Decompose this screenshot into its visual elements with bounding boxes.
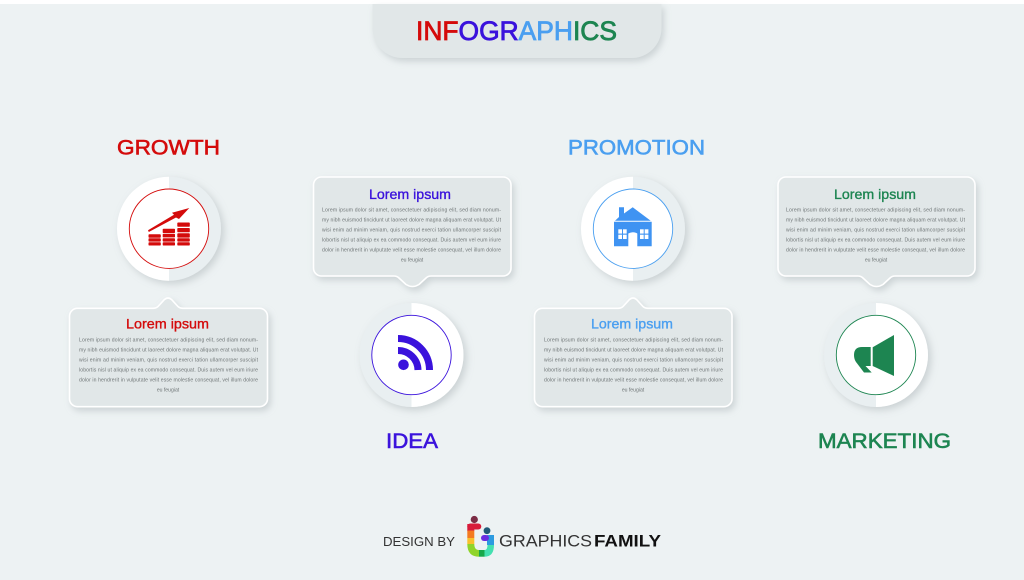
card heading: Lorem ipsum [834,186,916,202]
card body text: dolor in hendrerit in vulputate velit esse molestie consequat, vel illum dolore [544,378,723,384]
card body text: my nibh euismod tincidunt ut laoreet dolore magna aliquam erat volutpat. Ut [544,348,724,354]
card body text [322,208,502,264]
card body text: dolor in hendrerit in vulputate velit esse molestie consequat, vel illum dolore [322,248,501,254]
card body text: wisi enim ad minim veniam, quis nostrud exerci tation ullamcorper suscipit [786,228,966,234]
card body text [786,208,966,264]
card body text: eu feugiat [622,388,645,394]
panel: promotion text card [534,298,732,407]
title: INFOGRAPHICS [416,16,617,46]
icon: growth chart [148,208,190,246]
title banner [372,4,662,58]
card body text: Lorem ipsum dolor sit amet, consectetuer adipiscing elit, sed diam nonum- [544,338,723,344]
icon: megaphone [854,335,894,376]
card body text [79,338,259,394]
icon: graphicsfamily logo [467,516,494,557]
panel: marketing text card [778,177,975,286]
footer credit: FAMILY [594,533,661,551]
card body text: lobortis nisl ut aliquip ex ea commodo consequat. Duis autem vel eum iriure [322,238,501,244]
heading: growth: GROWTH [117,134,220,160]
card body text: wisi enim ad minim veniam, quis nostrud exerci tation ullamcorper suscipit [79,358,259,364]
card body text: Lorem ipsum dolor sit amet, consectetuer adipiscing elit, sed diam nonum- [786,208,965,214]
card body text: Lorem ipsum dolor sit amet, consectetuer adipiscing elit, sed diam nonum- [322,208,501,214]
card heading: Lorem ipsum [591,316,673,332]
card body text: lobortis nisl ut aliquip ex ea commodo consequat. Duis autem vel eum iriure [544,368,723,374]
icon: rss feed [398,338,430,370]
card body text: dolor in hendrerit in vulputate velit esse molestie consequat, vel illum dolore [79,378,258,384]
design by label: DESIGN BY [383,534,455,549]
panel: growth text card [70,298,268,407]
card body text: my nibh euismod tincidunt ut laoreet dolore magna aliquam erat volutpat. Ut [322,218,502,224]
card heading: Lorem ipsum [369,186,451,202]
card body text: eu feugiat [157,388,180,394]
brand wordmark: GRAPHICS [499,533,592,551]
card body text [544,338,724,394]
heading: promotion: PROMOTION [568,134,705,160]
circle: marketing [824,303,928,407]
card body text: my nibh euismod tincidunt ut laoreet dolore magna aliquam erat volutpat. Ut [786,218,966,224]
card body text: eu feugiat [401,258,424,264]
card body text: dolor in hendrerit in vulputate velit esse molestie consequat, vel illum dolore [786,248,965,254]
circle: promotion [581,177,685,281]
footer credit [383,516,661,557]
card body text: lobortis nisl ut aliquip ex ea commodo consequat. Duis autem vel eum iriure [79,368,258,374]
card body text: eu feugiat [865,258,888,264]
icon: house [614,207,652,246]
circle: growth [117,177,221,281]
card heading: Lorem ipsum [126,316,209,332]
card body text: wisi enim ad minim veniam, quis nostrud exerci tation ullamcorper suscipit [322,228,502,234]
card body text: Lorem ipsum dolor sit amet, consectetuer adipiscing elit, sed diam nonum- [79,338,258,344]
card body text: wisi enim ad minim veniam, quis nostrud exerci tation ullamcorper suscipit [544,358,724,364]
heading: marketing: MARKETING [818,428,951,453]
heading: idea: IDEA [386,428,439,453]
card body text: lobortis nisl ut aliquip ex ea commodo consequat. Duis autem vel eum iriure [786,238,965,244]
card body text: my nibh euismod tincidunt ut laoreet dolore magna aliquam erat volutpat. Ut [79,348,259,354]
circle: idea [360,303,464,407]
panel: idea text card [314,177,511,286]
